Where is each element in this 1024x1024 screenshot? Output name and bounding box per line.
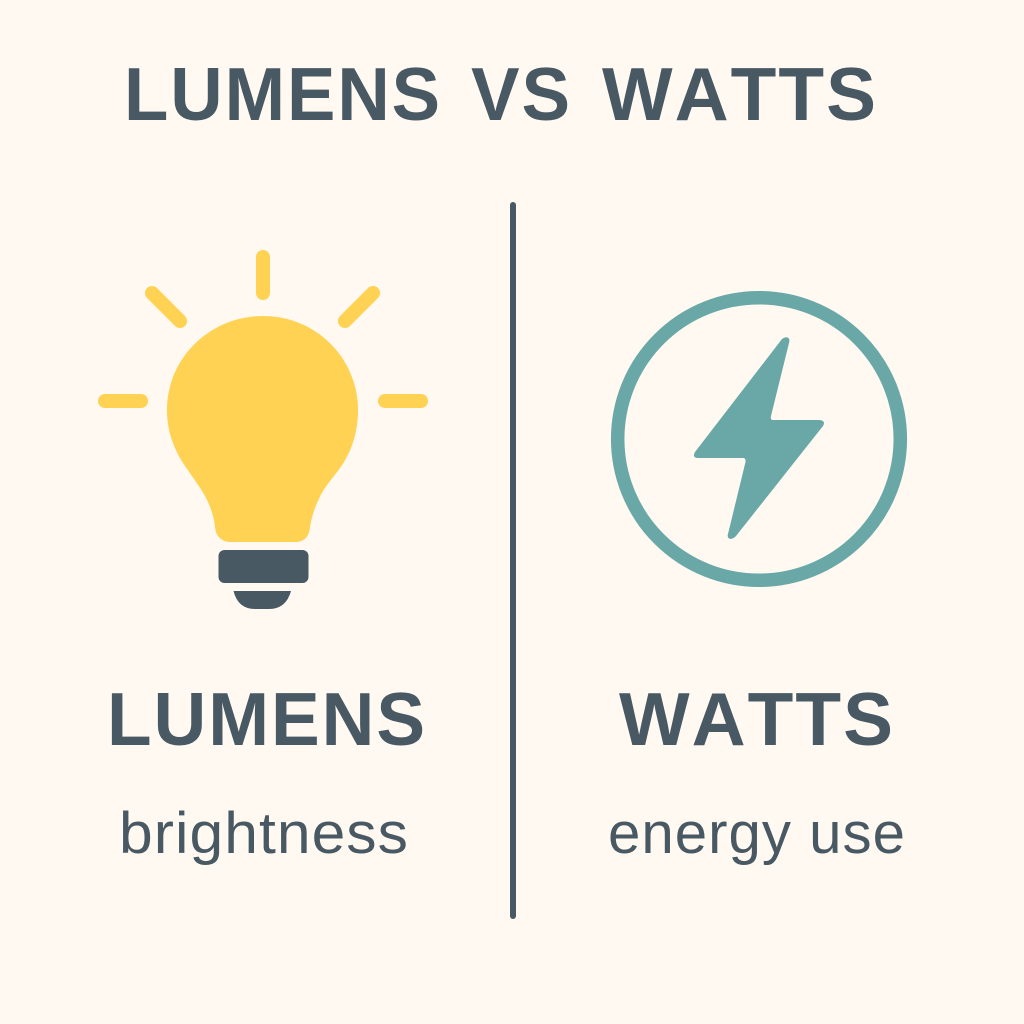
watts description: energy use	[608, 801, 906, 866]
title: VS	[471, 52, 572, 136]
center divider	[510, 202, 516, 919]
lightning bolt	[694, 337, 824, 539]
circle ring	[618, 298, 900, 580]
panel: watts	[608, 298, 906, 866]
title: LUMENS	[124, 52, 442, 136]
lumens heading: LUMENS	[107, 677, 427, 761]
bulb tip	[234, 591, 291, 609]
title	[124, 52, 878, 136]
icon: light bulb	[105, 257, 421, 609]
title: WATTS	[602, 52, 878, 136]
panel: lumens	[105, 257, 427, 866]
watts heading: WATTS	[619, 677, 895, 761]
lumens description: brightness	[119, 801, 409, 866]
bulb rays	[105, 257, 421, 401]
bulb glass	[167, 316, 358, 542]
icon: lightning in circle	[618, 298, 900, 580]
bulb base	[218, 550, 308, 583]
